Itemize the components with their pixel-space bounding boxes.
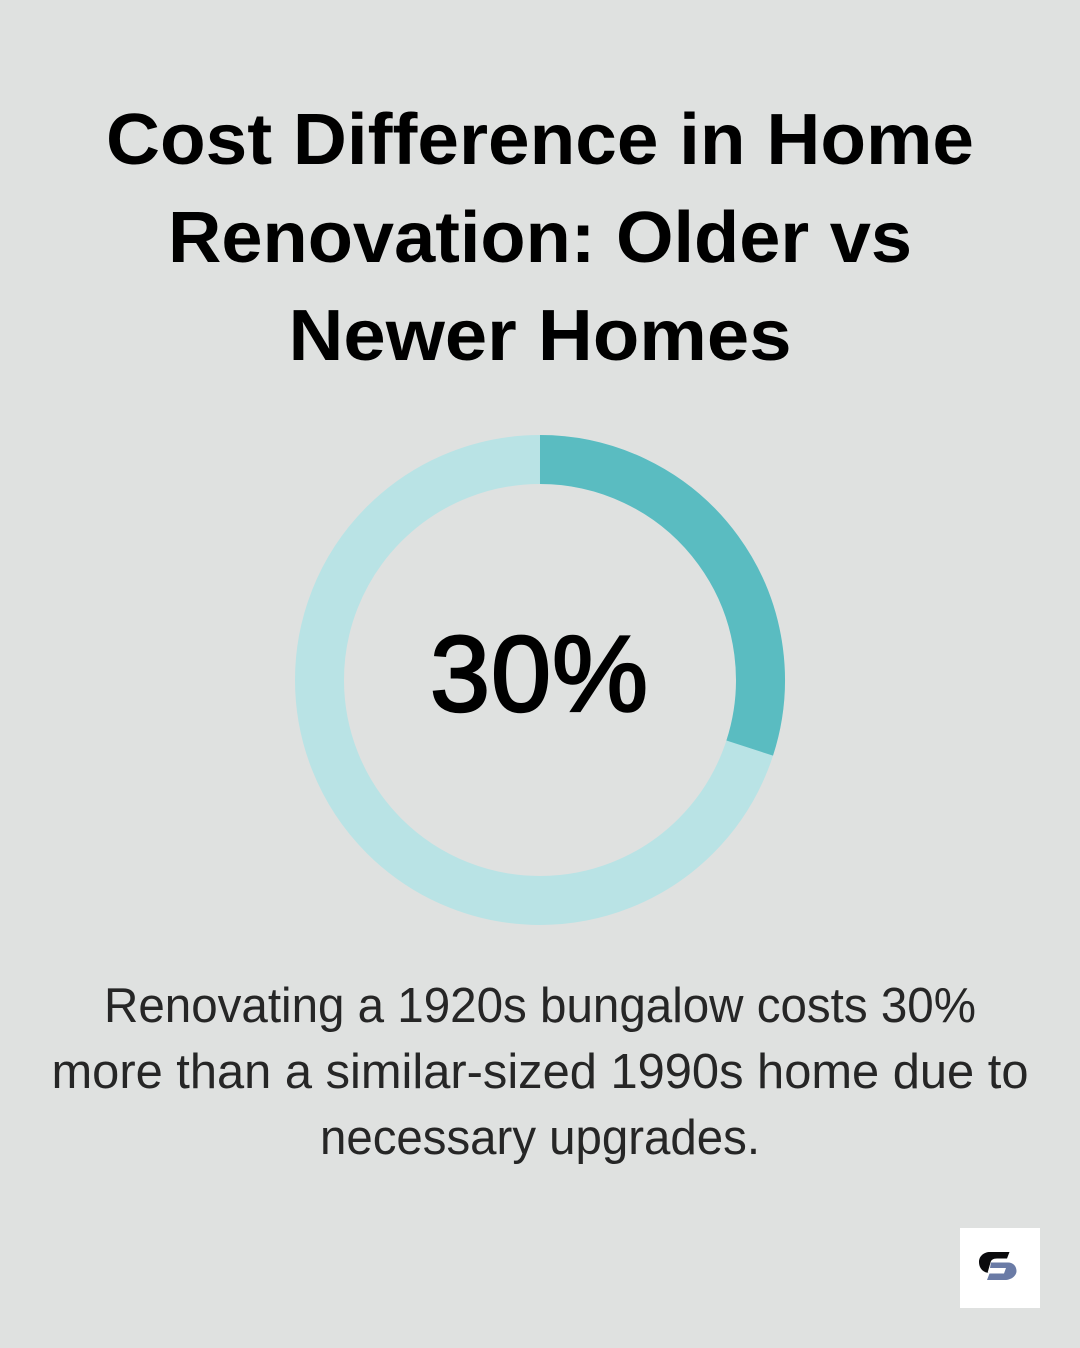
logo: blue lower stroke bbox=[987, 1262, 1016, 1280]
donut value arc bbox=[540, 460, 760, 748]
title: Cost Difference in Home bbox=[106, 100, 974, 180]
description text: Renovating a 1920s bungalow costs 30% bbox=[104, 979, 976, 1033]
description text: more than a similar-sized 1990s home due to bbox=[52, 1045, 1028, 1099]
logo: black upper stroke bbox=[979, 1252, 1010, 1273]
donut track bbox=[320, 460, 760, 900]
logo badge bbox=[960, 1228, 1040, 1308]
description text bbox=[52, 979, 1028, 1165]
donut chart: 30% bbox=[320, 460, 760, 900]
title bbox=[106, 100, 974, 376]
title: Renovation: Older vs bbox=[168, 198, 912, 278]
description text: necessary upgrades. bbox=[320, 1111, 760, 1165]
title: Newer Homes bbox=[288, 296, 792, 376]
donut value label: 30% bbox=[430, 613, 650, 734]
